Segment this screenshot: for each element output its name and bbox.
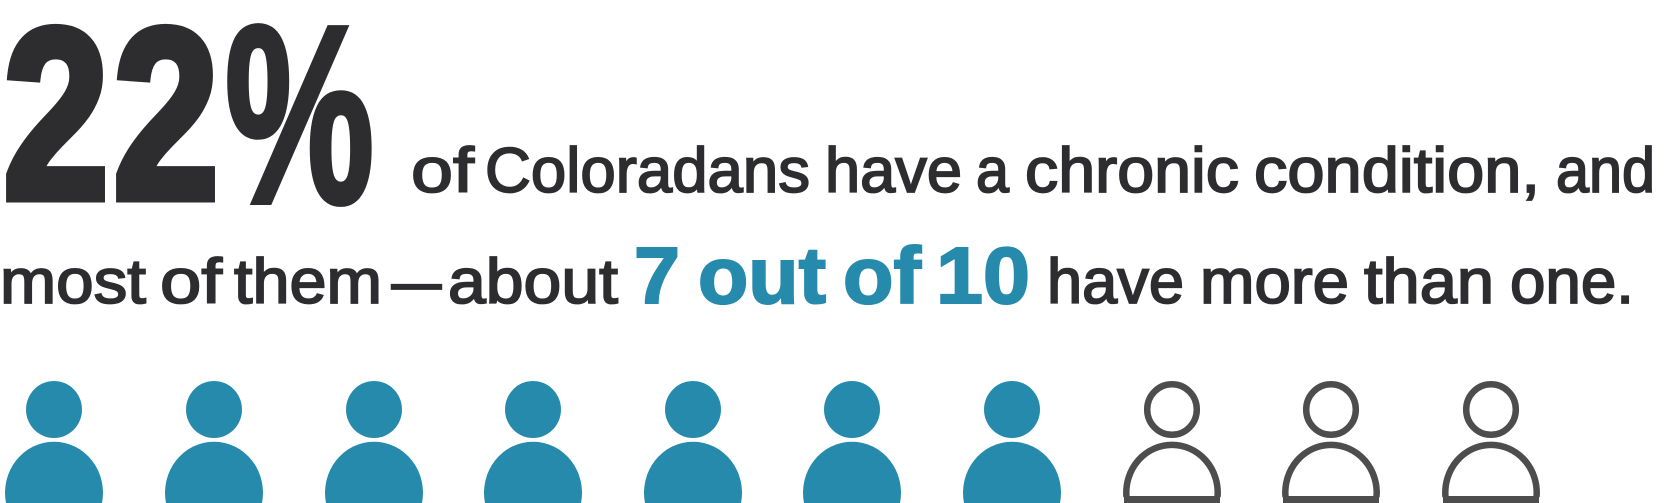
highlighted text: 7 out of 10: of <box>843 231 921 320</box>
icon: filled person 6 <box>803 381 901 503</box>
icon: filled person 4 <box>484 381 582 503</box>
statement text line 1: of <box>411 136 475 206</box>
statement text line 1: condition, <box>1254 136 1540 206</box>
statement text line 1: have <box>825 136 962 206</box>
highlighted text: 7 out of 10 <box>634 231 1030 320</box>
icon: filled person 3 <box>325 381 423 503</box>
statement text line 1: a <box>976 136 1010 206</box>
statement text line 2: end <box>1047 247 1634 317</box>
statement text line 2: start: of <box>160 247 223 317</box>
statement text line 2: start: – <box>392 247 441 317</box>
icon: filled person 1 <box>5 381 103 503</box>
icon: outline person 10 <box>1443 384 1539 503</box>
icon: filled person 7 <box>963 381 1061 503</box>
statement text line 2: start: about <box>448 247 619 317</box>
statement text line 2: end: one. <box>1510 247 1634 317</box>
pictogram: 7 of 10 people filled <box>5 381 1539 503</box>
statement text line 1: chronic <box>1025 136 1239 206</box>
statement text line 1 <box>411 136 1655 206</box>
statement text line 1: Coloradans <box>485 136 810 206</box>
highlighted text: 7 out of 10: out <box>698 231 826 320</box>
icon: filled person 5 <box>644 381 742 503</box>
statement text line 2: end: more <box>1200 247 1349 317</box>
statement text line 2: start: most <box>0 247 147 317</box>
statement text line 2: start: them <box>234 247 382 317</box>
statement text line 2: start <box>0 247 619 317</box>
highlighted text: 7 out of 10: 7 <box>634 231 680 320</box>
icon: outline person 9 <box>1283 384 1379 503</box>
statement text line 2: end: than <box>1364 247 1494 317</box>
highlighted text: 7 out of 10: 10 <box>936 231 1030 320</box>
statement text line 2: end: have <box>1047 247 1184 317</box>
icon: outline person 8 <box>1124 384 1220 503</box>
big statistic: 22% <box>3 0 374 256</box>
icon: filled person 2 <box>165 381 263 503</box>
statement text line 1: and <box>1556 136 1655 206</box>
